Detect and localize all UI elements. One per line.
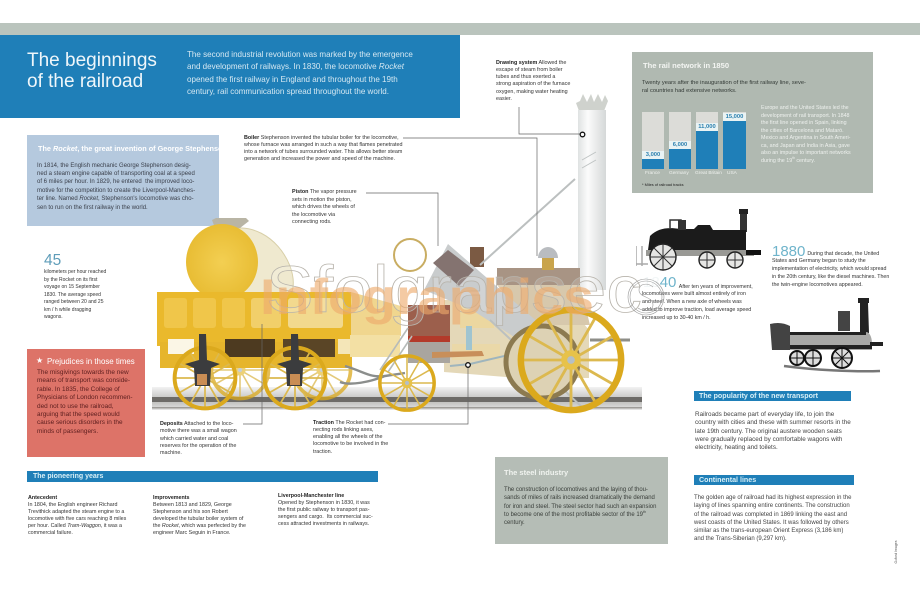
watermark orange text: Infographics [260, 269, 594, 325]
stat number: 45 [44, 252, 61, 269]
callout: drawing system: oxygen, making water heating [496, 89, 568, 95]
side text: the cities of Barcelona and Mataró. [761, 128, 844, 134]
text 1880: the twin-engine locomotives appeared. [772, 282, 863, 288]
stat: 1880 [772, 243, 889, 288]
text: popularity: Railroads became part of everyday life, to join the [695, 411, 834, 418]
engraving: twin-engine locomotive 1880 [770, 298, 883, 372]
side text: development of rail transport. In 1848 [761, 113, 850, 119]
panel body: cause serious disorders in the [37, 419, 123, 426]
text: continental lines: similar as the trans-european Orient Express (3,186 km) [694, 528, 843, 534]
section heading: continental lines [694, 475, 854, 485]
image credit: Oxford Images [894, 541, 898, 563]
spring hangers [185, 334, 312, 386]
text 1880: in the 20th century, like the diesel machines. Then [772, 274, 889, 280]
panel: the Rocket [27, 135, 219, 226]
text 1840: locomotives were built almost entirely of iron [642, 291, 746, 297]
text: continental lines [694, 494, 852, 542]
callout: deposits: machine. [160, 450, 182, 456]
heading text: Continental lines [699, 476, 756, 484]
column: antecedent: per hour. Called Tram-Waggon, it was a [28, 523, 122, 529]
text: continental lines: laying of lines spanning entire continents. The construction [694, 503, 850, 509]
column: improvements [153, 495, 246, 536]
stat text: km / h while dragging [44, 306, 91, 312]
bar: Germany [669, 112, 691, 169]
engine body [380, 239, 630, 378]
ground and rails [152, 387, 642, 410]
panel body: for iron and steel. The steel sector had such an expansion [504, 504, 656, 510]
bar chart [642, 112, 746, 176]
column: Liverpool-Manchester line: sengers and cargo. Its commercial suc- [278, 514, 373, 520]
bar: USA [723, 112, 746, 169]
panel body: sands of miles of rails increased dramatically the demand [504, 495, 655, 501]
text: continental lines: west coasts of the United States. It was followed by others [694, 520, 849, 526]
column: improvements: developed the tubular boiler system of [153, 516, 243, 522]
callout: traction: Traction The Rocket had con- [313, 420, 385, 426]
panel body: ded not to use the railroad, [37, 403, 114, 410]
panel body: ter line. Named Rocket, Stephenson's locomotive was cho- [37, 196, 194, 202]
callout: boiler: into a network of tubes surrounded water. This allows better steam [244, 149, 402, 155]
panel body: means of transport was conside- [37, 377, 130, 384]
callout: piston: the locomotive via [292, 212, 335, 218]
column: antecedent: locomotive with five cars reaching 8 miles [28, 516, 126, 522]
text 1880: implementation of electricity, which would spread [772, 266, 886, 272]
callout: traction: necting rods linking axes, [313, 427, 374, 433]
panel body: ned a steam engine capable of transporting coal at a speed [37, 171, 195, 177]
panel heading: The rail network in 1850 [643, 61, 729, 70]
bar labels: Germany [669, 171, 689, 176]
intro text: and development of railways. In 1830, the locomotive Rocket [187, 62, 404, 71]
panel heading: The steel industry [504, 468, 568, 477]
panel body: In 1814, the English mechanic George Stephenson desig- [37, 162, 191, 168]
callout: traction [313, 420, 388, 455]
stat text: by the Rocket on its first [44, 276, 97, 282]
bar: France [642, 112, 664, 169]
text: popularity: were gradually replaced by comfortable wagons with [695, 436, 842, 443]
stat text: voyage on 15 September [44, 284, 100, 290]
callout: deposits: Deposits Attached to the loco- [160, 421, 233, 427]
callout: piston: which drives the wheels of [292, 204, 355, 210]
text: continental lines: of the railroad was completed in 1869 linking the east and [694, 512, 847, 518]
column: improvements: Improvements [153, 495, 190, 501]
text 1840: After ten years of improvement, [679, 284, 753, 290]
tender wagon [157, 292, 401, 368]
callout: piston: connecting rods. [292, 219, 332, 225]
stat text: ranged between 20 and 25 [44, 299, 104, 305]
text 1840: increased up to 30-40 km / h. [642, 315, 711, 321]
panel body: The construction of locomotives and the laying of thou- [504, 487, 648, 493]
engraving: steam locomotive 1840 [636, 209, 761, 271]
panel heading: Prejudices in those times [47, 357, 135, 366]
front tender wheels [175, 348, 325, 408]
callout: boiler [244, 134, 403, 162]
text: continental lines: The golden age of railroad had its highest expression in the [694, 495, 851, 501]
column: antecedent: commercial failure. [28, 530, 73, 536]
bar: Great Britain: 11,000 [698, 124, 716, 130]
top grey band [0, 23, 920, 35]
bar labels [645, 170, 737, 176]
panel lead text: ral countries had extensive networks. [642, 88, 737, 94]
panel: the rail network in 1850 [632, 52, 873, 193]
panel body: motive for the competition to create the Liverpool-Manches- [37, 188, 195, 194]
text: popularity: late 19th century. The original austere wooden seats [695, 428, 842, 435]
section: the pioneering years [27, 471, 378, 482]
bar labels: Great Britain [695, 171, 722, 176]
callout: drawing system: escape of steam from boiler [496, 67, 563, 73]
diagonal stay rods [480, 179, 585, 410]
text: popularity: electricity, heating and toilets. [695, 444, 778, 451]
stat text: wagons. [44, 314, 63, 320]
intro text: The second industrial revolution was marked by the emergence [187, 50, 413, 58]
watermark outline text: Sfolgrapsec [266, 252, 642, 326]
panel body: The misgivings towards the new [37, 369, 129, 376]
callout: drawing system: tubes and thus exerted a [496, 74, 555, 80]
rear tender wheels [211, 341, 351, 399]
watermark stamp [628, 278, 664, 316]
column: Liverpool-Manchester line: the first public railway to transport pas- [278, 507, 369, 513]
panel lead text [642, 80, 806, 94]
footnote: * Miles of railroad tracks [642, 182, 684, 187]
side text [761, 105, 851, 164]
section heading: The pioneering years [33, 473, 103, 480]
side text: also an impulse to important networks [761, 150, 851, 156]
callout: piston: Piston The vapor pressure [292, 189, 357, 195]
stat: 1840 [642, 274, 753, 321]
callout: deposits: motive there was a small wagon [160, 428, 237, 434]
water barrel [186, 218, 293, 306]
side text: Europe and the United States led the [761, 105, 849, 111]
panel: the steel industry [495, 457, 668, 544]
side text: the first line opened in Spain, linking [761, 120, 847, 126]
bar: Germany: 6,000 [673, 142, 687, 148]
column: improvements: the Rocket, which was perfected by the [153, 523, 246, 529]
heading text: The popularity of the new transport [699, 392, 818, 400]
text: popularity: country with cities and these with summer resorts in the [695, 419, 851, 426]
column: improvements: engineer Marc Seguin in France. [153, 530, 231, 536]
panel: prejudices [27, 349, 145, 457]
callout: deposits: which carried water and coal [160, 436, 228, 442]
panel body: sen to run on the first railway in the world. [37, 205, 148, 211]
panel body: century. [504, 520, 525, 526]
panel body [504, 486, 656, 526]
big driving wheel [521, 310, 621, 410]
side text: Mexico and Argentina in South Ameri- [761, 135, 850, 141]
column: improvements: Between 1813 and 1829, George [153, 502, 232, 508]
callout: traction: traction. [313, 449, 332, 455]
star icon: ★ [36, 356, 43, 365]
text: popularity [695, 411, 851, 451]
intro text: century, rail communication spread throughout the world. [187, 87, 389, 96]
panel body [37, 162, 195, 211]
rear driving shadow wheel [506, 326, 578, 398]
coupling [340, 366, 405, 384]
text: continental lines: and the Trans-Siberian (9,297 km). [694, 536, 787, 542]
panel body: minds of passengers. [37, 428, 98, 435]
panel body: arguing that the speed would [37, 411, 120, 418]
column: Liverpool-Manchester line: Liverpool-Manchester line [278, 493, 344, 499]
column: Liverpool-Manchester line: Opened by Stephenson in 1830, it was [278, 500, 370, 506]
panel lead text: Twenty years after the inauguration of the first railway line, seve- [642, 80, 806, 86]
text 1840: and steel. When a new axle of wheels was [642, 299, 742, 305]
bar labels: France [645, 171, 660, 176]
year 1840: 1840 [643, 274, 676, 291]
panel body: Physicians of London recommen- [37, 394, 133, 401]
column: Liverpool-Manchester line [278, 493, 373, 527]
intro text: opened the first railway in England and throughout the 19th [187, 75, 398, 84]
section heading: popularity [694, 391, 851, 401]
text 1880: States and Germany began to study the [772, 258, 866, 264]
column: Liverpool-Manchester line: cess attracted investments in railways. [278, 521, 369, 527]
callout: piston [292, 189, 357, 225]
front small wheel [380, 356, 434, 410]
bar labels: USA [727, 171, 737, 176]
leader lines [243, 107, 585, 424]
callout: boiler: whose furnace was arranged in such a way that flames penetrated [244, 142, 403, 148]
callout: drawing system [496, 60, 570, 102]
panel body [37, 369, 133, 435]
title: of the railroad [27, 70, 143, 92]
callout: deposits: reserves for the operation of the [160, 443, 236, 449]
column: antecedent: In 1804, the English engineer Richard [28, 502, 117, 508]
year 1880: 1880 [772, 243, 805, 260]
column: improvements: Stephenson and his son Robert [153, 509, 228, 515]
header banner [0, 35, 460, 118]
text 1840 [642, 284, 753, 321]
stat text: 1830. The average speed [44, 292, 101, 298]
intro text [187, 50, 413, 96]
callout: drawing system: easier. [496, 96, 512, 102]
stat: 45 km/h [44, 252, 106, 320]
callout: piston: sets in motion the piston, [292, 196, 352, 202]
callout: traction: locomotive to be involved in the [313, 441, 388, 447]
bar: France: 3,000 [646, 152, 660, 158]
column: antecedent: Antecedent [28, 495, 57, 501]
title [27, 50, 157, 92]
panel body: of 6 miles per hour. In 1829, he entered the improved loco- [37, 179, 194, 185]
stat text: kilometers per hour reached [44, 269, 106, 275]
side text: ca, and Japan and India in Asia, gave [761, 143, 850, 149]
column: antecedent [28, 495, 126, 536]
callout: deposits [160, 421, 237, 456]
callout: boiler: generation and increased the power and speed of the machine. [244, 156, 395, 162]
callout: boiler: Boiler Stephenson invented the tubular boiler for the locomotive, [244, 134, 399, 140]
callout: drawing system: Drawing system Allowed the [496, 60, 566, 66]
panel body: to become one of the most profitable sector of the 19th [504, 510, 646, 518]
chimney [576, 94, 608, 290]
stat text [44, 269, 106, 320]
side text: during the 19th century. [761, 156, 815, 164]
callout: traction: enabling all the wheels of the [313, 434, 383, 440]
text 1880 [772, 250, 889, 288]
text 1880: During that decade, the United [807, 250, 879, 256]
panel body: rable. In 1835, the College of [37, 386, 120, 393]
callout: drawing system: strong aspiration of the furnace [496, 81, 570, 87]
text 1840: added to improve traction, load average speed [642, 307, 751, 313]
column: antecedent: Trevithick adapted the steam engine to a [28, 509, 124, 515]
bar: USA: 15,000 [726, 114, 743, 120]
bar: Great Britain [696, 112, 718, 169]
title: The beginnings [27, 50, 157, 71]
